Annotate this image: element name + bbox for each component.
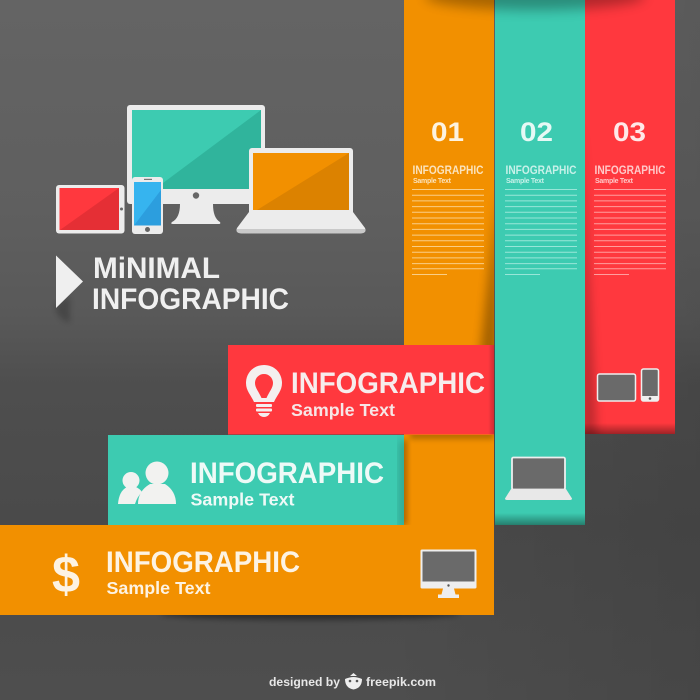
top shadow across columns <box>425 0 645 10</box>
column 2 text: INFOGRAPHIC <box>506 163 577 177</box>
panel: teal banner <box>108 435 407 530</box>
banner heading: INFOGRAPHIC <box>291 367 485 400</box>
teal column <box>495 0 585 525</box>
icon: laptop <box>236 148 366 234</box>
red column <box>581 0 675 440</box>
icon: light bulb <box>246 365 282 417</box>
column 1 text <box>412 117 484 274</box>
icon: freepik mascot <box>345 673 362 690</box>
shadow below bottom bar <box>163 615 456 622</box>
icon: dollar sign: $ <box>52 546 80 604</box>
icon: desktop monitor <box>127 105 265 224</box>
column 3 text <box>594 117 666 274</box>
banner subtext: Sample Text <box>291 400 395 420</box>
column 3 text: 03 <box>613 117 646 147</box>
column 1 text: Sample Text <box>413 178 452 185</box>
title arrow <box>56 256 83 322</box>
banner subtext: Sample Text <box>106 578 211 598</box>
icon: tablet <box>56 185 124 234</box>
title: MiNIMAL <box>93 252 220 285</box>
icon: small monitor <box>420 550 476 598</box>
column 3 text: Sample Text <box>595 178 634 185</box>
icon: small tablet and phone <box>598 369 658 401</box>
column 2 text: Sample Text <box>506 178 545 185</box>
orange column and bottom bar <box>0 0 498 615</box>
column 1 text: 01 <box>431 117 464 147</box>
panel: red banner <box>228 345 494 434</box>
title <box>92 252 289 316</box>
footer credit <box>269 673 436 690</box>
panel: orange banner content <box>52 546 476 604</box>
banner heading: INFOGRAPHIC <box>190 457 384 490</box>
banner heading: INFOGRAPHIC <box>106 546 300 579</box>
title: INFOGRAPHIC <box>92 283 289 316</box>
column 3 text: INFOGRAPHIC <box>594 163 666 177</box>
icon: small laptop <box>505 458 572 500</box>
column 2 text <box>505 117 577 274</box>
icon: people <box>118 462 176 504</box>
column 2 text: 02 <box>520 117 553 147</box>
column 1 text: INFOGRAPHIC <box>412 163 484 177</box>
icon: smartphone <box>132 177 163 234</box>
banner subtext: Sample Text <box>190 490 295 510</box>
footer credit: designed by <box>269 677 341 689</box>
footer credit: freepik.com <box>366 677 436 689</box>
